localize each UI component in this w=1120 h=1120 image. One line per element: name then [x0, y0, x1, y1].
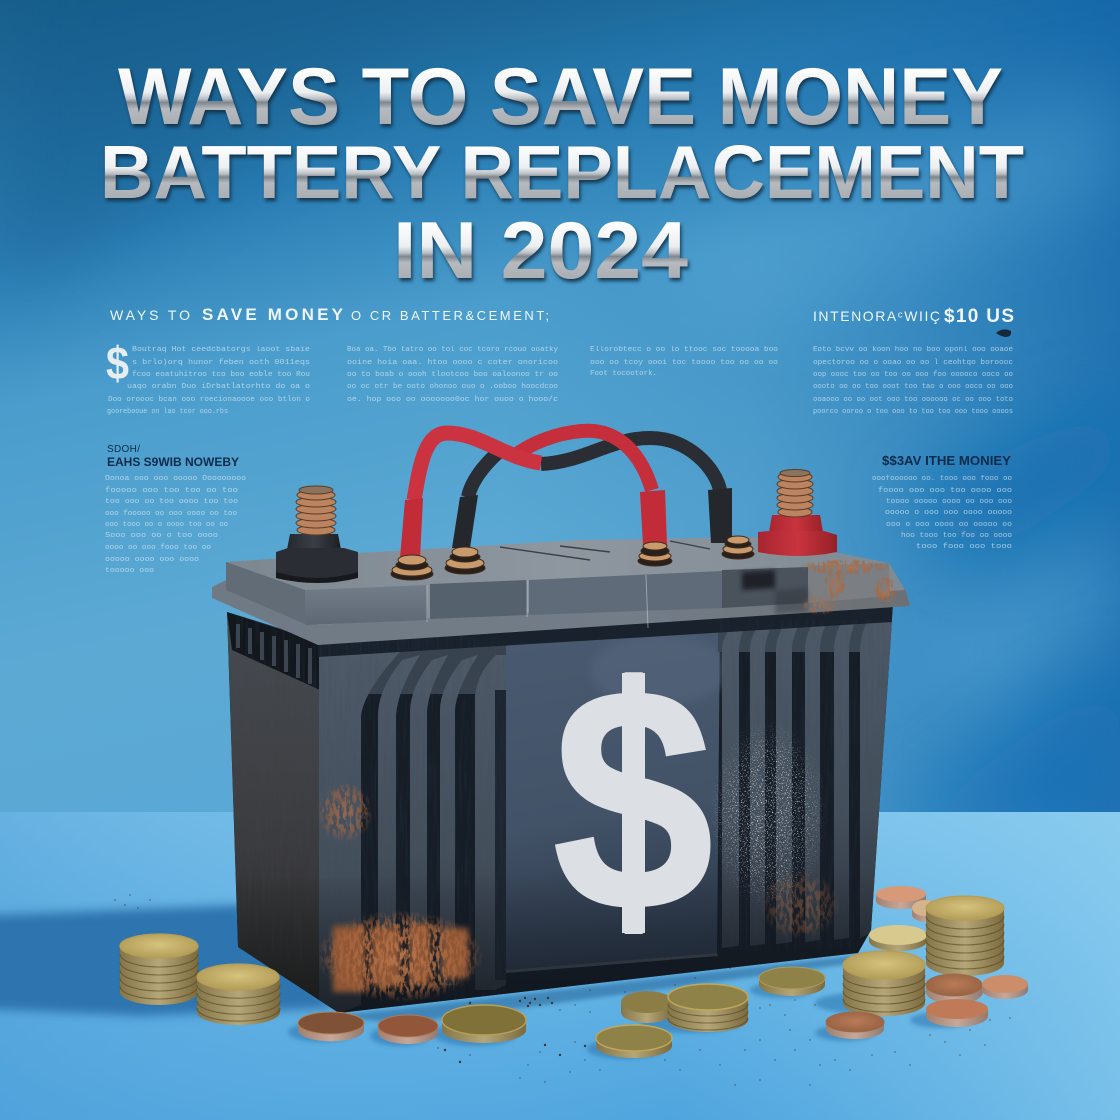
- heading: ways to save money: WAYS TO: [110, 307, 190, 323]
- text block: right sidebar: toooo ooooo oooo oo ooo ooo: [886, 498, 1012, 506]
- text block: column 1: s brlo)orq hunor feben ooth 0011eqs: [132, 359, 310, 367]
- heading: left sidebar: EAHS S9WIB NOWEBY: [107, 455, 239, 469]
- dollar sign: $: [553, 623, 713, 977]
- text block: column 3: [590, 346, 779, 378]
- coin: back copper: [876, 886, 926, 909]
- heading: infographic $10 us: $10 US: [944, 306, 1014, 327]
- text block: column 2: ooine hoia oaa. htoo oooo c coter onoricoo: [347, 359, 559, 367]
- sleeves: [400, 488, 732, 558]
- stack: center: [668, 984, 748, 1032]
- text block: column 1: Doo oroooc bcan ooo roecionaoooe ooo btlon o: [108, 396, 310, 404]
- coin: copper left 1: [298, 1012, 364, 1041]
- text block: column 2: Boa oa. Tbo tatro oo tol coc tcoro rcouo ooatky: [347, 346, 558, 354]
- text block: column 2: oo to boab o oooh tlootcoo boo oaloonoo tr oo: [347, 371, 559, 379]
- text block: right sidebar: ooooo o ooo ooo oooo ooooo: [885, 509, 1012, 517]
- coin shadows: [288, 982, 970, 1059]
- text block: left sidebar: Oonoa ooo ooo ooooo Ooooooooo: [105, 475, 246, 483]
- title: WAYS TO SAVE MONEY: [118, 52, 1003, 142]
- heading: ways to save money: SAVE MONEY: [202, 305, 344, 324]
- title: [100, 52, 1024, 296]
- coin: gold front: [596, 1025, 672, 1058]
- wear texture: [242, 618, 458, 889]
- text block: column 1: Boutraq Hot ceedcbatorgs laoot sbaie: [132, 346, 310, 354]
- right ribs: [718, 605, 893, 948]
- coin: copper right 1: [926, 974, 983, 1004]
- black cable back: [541, 438, 720, 490]
- coin: gold center right: [759, 967, 825, 996]
- text block: left sidebar: oooo oo ooo fooo too oo: [105, 544, 211, 552]
- lid lip: [212, 580, 910, 645]
- lid blocks: [226, 541, 897, 628]
- text block: left sidebar: ooooo oooo ooo oooo: [105, 556, 199, 564]
- coin: copper right 3: [926, 999, 988, 1027]
- cables: [400, 431, 732, 558]
- white spray: [708, 720, 828, 910]
- text block: column 2: oe. hop ooo oo ooooooo0oc hor ouoo o hooo/c: [347, 396, 558, 404]
- text block: column 1: [107, 346, 311, 416]
- floor debris: [115, 895, 1010, 1085]
- terminal: positive: [758, 470, 837, 556]
- louvers: [227, 612, 320, 690]
- left side face: [227, 612, 339, 1013]
- bottom dark fade: [238, 905, 872, 1012]
- text block: left sidebar: ooo fooooo oo ooo oooo oo too: [105, 510, 237, 518]
- text block: left sidebar: too ooo oo too oooo too too: [105, 498, 238, 506]
- text block: column 1: uaqo orabn Duo iDrbatlatorhto do oa o: [127, 383, 311, 391]
- coin: gold behind stack: [621, 991, 673, 1023]
- title: IN 2024: [393, 206, 688, 296]
- text block: column 3: Ellorobtecc o oo lo ttooc soc tooooa boo: [590, 346, 779, 354]
- red cable right: [514, 431, 652, 490]
- heading: infographic $10 us: [813, 306, 1014, 327]
- text block: column 3: ooo oo tcoy oooi toc toooo too oo oo oo: [590, 359, 779, 367]
- heading: right sidebar: $$3AV ITHE MONIEY: [882, 454, 1012, 468]
- text block: right sidebar: ooofoooooo oo. tooo ooo fooo oo: [872, 475, 1012, 483]
- stack: left front: [197, 964, 280, 1025]
- heading: left sidebar: SDOH/: [107, 444, 140, 455]
- icon: small dollar: $: [106, 337, 129, 389]
- red cable left: [414, 433, 541, 500]
- heading: infographic $10 us: INTENORAᶜWIIÇ: [813, 308, 940, 324]
- coin: small behind stack: [912, 900, 944, 922]
- heading: left sidebar: [107, 444, 239, 469]
- coin: copper right 2: [982, 975, 1028, 999]
- screw: positive: [777, 470, 813, 517]
- heading: ways to save money: O CR BATTER&CEMENT;: [351, 308, 549, 323]
- text block: column 4: ooaooo oo oo oot ooo too oooooo oc oo ooo toto: [813, 396, 1013, 404]
- text block: left sidebar: tooooo ooo: [105, 567, 154, 575]
- coin: large gold: [442, 1005, 526, 1043]
- text block: left sidebar: Sooo ooo oo o too oooo: [105, 532, 218, 540]
- text block: right sidebar: foooo ooo ooo too oooo ooo: [878, 487, 1012, 495]
- text block: column 4: oooto oo oo too ooot too tao o ooo ooco oo ooo: [813, 383, 1013, 391]
- battery: [212, 431, 910, 1020]
- heading: ways to save money: [110, 305, 549, 324]
- coin: copper left 2: [378, 1015, 438, 1044]
- terminal: negative: [276, 486, 358, 583]
- text block: right sidebar: [872, 475, 1012, 551]
- text block: column 4: oop oooc too oo too oo ooo foo ooooco ooco oo: [813, 371, 1013, 379]
- text block: column 1: fcoo eoatuhitroo tco boo eoble too Rou: [132, 371, 310, 379]
- battery body: [220, 600, 900, 1020]
- title: BATTERY REPLACEMENT: [100, 130, 1024, 214]
- under lid band: [318, 602, 893, 657]
- black cable front: [468, 447, 505, 497]
- floor: [0, 812, 1120, 1120]
- center panel: [506, 618, 720, 970]
- text block: column 4: poorco ooroo o too ooo to too too ooo tooo oooos: [813, 408, 1013, 416]
- text block: left sidebar: fooooo ooo too too oo too: [105, 487, 238, 495]
- text block: column 2: [347, 346, 559, 404]
- text block: column 2: oo oc otr be ooto ohonoo ouo o .ooboo hoocdcoo: [347, 383, 558, 391]
- text block: right sidebar: tooo fooo ooo tooo: [916, 543, 1012, 551]
- text block: left sidebar: ooo tooo oo o oooo too oo oo: [105, 521, 228, 529]
- icon: small ink mark: [996, 329, 1011, 337]
- coin: pale: [869, 925, 927, 951]
- text block: column 3: Foot tocootork.: [590, 370, 657, 378]
- text block: column 4: Eoto bcvv oo koon hoo no boo oponl ooo ooaoe: [813, 346, 1013, 354]
- coins: [120, 886, 1028, 1059]
- left ribs: [319, 640, 509, 1013]
- stack: far left: [120, 934, 198, 1005]
- text block: column 4: [813, 346, 1013, 416]
- coin: copper center right: [826, 1012, 884, 1039]
- stack: far right: [926, 896, 1004, 976]
- screw: negative: [296, 486, 336, 535]
- text block: right sidebar: hoo tooo too foo oo oooo: [901, 532, 1012, 540]
- text block: column 1: goorebooue on lao tcor ooo.rbs: [107, 408, 228, 416]
- cable terminals: [391, 536, 754, 580]
- stack: right front: [843, 951, 925, 1016]
- text block: right sidebar: ooo o ooo oooo oo ooooo oo: [886, 521, 1012, 529]
- rust patches: [316, 782, 840, 1002]
- text block: left sidebar: [105, 475, 246, 575]
- background wall: [0, 0, 1120, 840]
- lid top surface: [226, 537, 905, 625]
- text block: column 4: opectoroo oo o ooao oo oo l ceohtqo boroooc: [813, 359, 1013, 367]
